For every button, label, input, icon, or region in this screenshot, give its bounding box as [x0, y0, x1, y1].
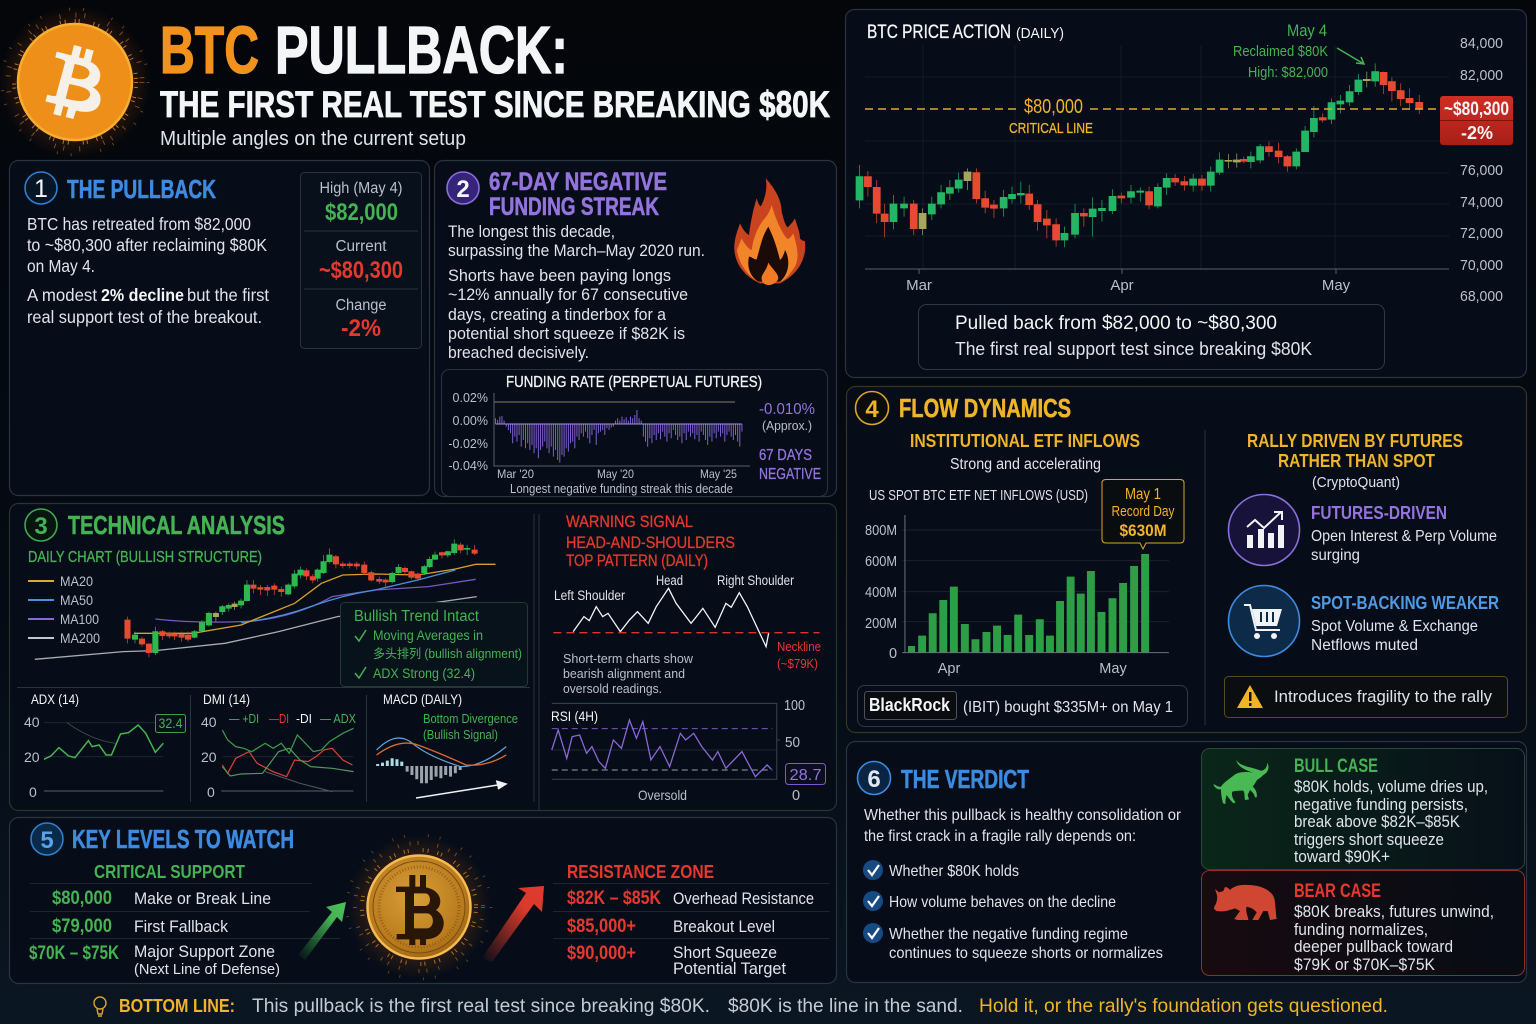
current price tag	[1440, 96, 1513, 145]
body text: BTC has retreated from $82,000	[27, 214, 251, 234]
chart: funding rate: NEGATIVE	[759, 466, 821, 483]
chart: ADX: 0	[29, 784, 37, 800]
critical line $80,000	[865, 96, 1440, 137]
chart: DMI: —DI	[269, 712, 289, 726]
heading: 67-DAY NEGATIVE	[489, 168, 667, 196]
icon: light bulb	[94, 997, 106, 1016]
support levels table: $79,000	[52, 916, 112, 937]
chart: funding rate	[442, 370, 828, 496]
ETF subheading	[869, 431, 1140, 504]
chart: ADX: 40	[24, 714, 40, 730]
price axis labels: 74,000	[1460, 194, 1503, 211]
panel: the pullback	[10, 160, 430, 496]
warning note: oversold readings.	[563, 681, 662, 696]
stats box: High (May 4)	[320, 180, 402, 197]
chart: funding rate: -0.010%	[759, 401, 815, 418]
ETF subheading: US SPOT BTC ETF NET INFLOWS (USD)	[869, 488, 1088, 504]
bull case: $80K holds, volume dries up,	[1294, 778, 1488, 796]
panel: key levels to watch	[10, 818, 836, 984]
icon: bear	[1214, 885, 1277, 920]
number badge 2: 2	[456, 176, 470, 203]
icon: bull	[1213, 760, 1268, 804]
icon: flame	[734, 178, 805, 285]
header: coin icon	[0, 6, 151, 158]
chart: head and shoulders pattern: Left Shoulder	[554, 588, 625, 603]
support levels table: First Fallback	[134, 918, 229, 936]
callout: record day: $630M	[1120, 521, 1166, 540]
price axis labels	[1460, 35, 1503, 305]
resistance levels table: Breakout Level	[673, 918, 775, 936]
callout: bullish trend intact: Bullish Trend Intact	[354, 608, 480, 625]
heading: FUNDING STREAK	[489, 193, 659, 221]
chart: ADX: ADX (14)	[31, 691, 79, 707]
bull case	[1202, 748, 1524, 870]
chart: RSI: 100	[784, 698, 805, 714]
current price tag: -2%	[1461, 123, 1493, 143]
futures subheading: RALLY DRIVEN BY FUTURES	[1247, 431, 1463, 451]
chart: ADX: 32.4	[158, 716, 183, 731]
futures-driven text: Open Interest & Perp Volume	[1311, 528, 1497, 545]
chart: RSI: 0	[792, 788, 800, 804]
number badge 1: 1	[34, 175, 48, 203]
bear case: $80K breaks, futures unwind,	[1294, 903, 1494, 921]
resistance levels table: $90,000+	[567, 943, 636, 964]
May 4 annotation: Reclaimed $80K	[1233, 44, 1328, 60]
resistance levels table: RESISTANCE ZONE	[567, 862, 714, 882]
callout: bullish trend intact: Moving Averages in	[373, 628, 483, 643]
warning note: bearish alignment and	[563, 666, 685, 681]
candlestick chart	[856, 45, 1449, 274]
May 4 annotation	[1233, 22, 1364, 81]
chart: funding rate: 0.00%	[453, 414, 488, 428]
verdict intro	[864, 807, 1182, 845]
month labels: Apr	[1110, 277, 1134, 294]
price axis labels: 72,000	[1460, 225, 1503, 242]
BlackRock callout: (IBIT) bought $335M+ on May 1	[963, 699, 1173, 716]
spot-backing text	[1311, 592, 1499, 654]
bull case: toward $90K+	[1294, 848, 1390, 866]
body text: breached decisively.	[448, 343, 589, 362]
warning note	[563, 651, 694, 696]
ETF subheading: Strong and accelerating	[950, 456, 1101, 473]
chart: ADX	[24, 691, 186, 800]
chart: head and shoulders pattern: Neckline	[777, 639, 821, 654]
resistance levels table	[553, 862, 830, 978]
number badge 5	[31, 823, 63, 855]
chart: MACD: Bottom Divergence	[423, 712, 518, 726]
moving average legend: MA100	[60, 611, 99, 627]
bear case: funding normalizes,	[1294, 921, 1428, 939]
checklist: continues to squeeze shorts or normalizes	[889, 945, 1163, 962]
checklist: Whether the negative funding regime	[889, 926, 1128, 943]
warning signal heading	[566, 513, 735, 570]
chart: DMI: DMI (14)	[203, 691, 250, 707]
checklist: How volume behaves on the decline	[889, 894, 1116, 911]
number badge 4	[856, 392, 888, 424]
BlackRock callout	[858, 686, 1188, 726]
title: Multiple angles on the current setup	[160, 128, 466, 150]
critical line $80,000: $80,000	[1024, 96, 1083, 118]
bull case: negative funding persists,	[1294, 796, 1468, 814]
price axis labels: 82,000	[1460, 67, 1503, 84]
support levels table: $80,000	[52, 888, 112, 909]
verdict intro: the first crack in a fragile rally depends on:	[864, 828, 1136, 845]
bar chart: ETF inflows: May	[1099, 661, 1127, 677]
month labels: Mar	[906, 277, 932, 294]
support levels table: Major Support Zone	[134, 943, 275, 961]
number badge 3: 3	[34, 513, 48, 540]
moving average legend: MA50	[60, 592, 93, 608]
heading: THE VERDICT	[901, 764, 1029, 794]
icon: shopping cart	[1228, 586, 1300, 656]
chart: DMI: — ADX	[320, 712, 357, 726]
body text: real support test of the breakout.	[27, 307, 262, 327]
chart: funding rate: May '20	[597, 467, 634, 481]
month labels	[906, 277, 1351, 294]
chart: head and shoulders pattern: Head	[656, 573, 683, 588]
BlackRock callout: BlackRock	[869, 695, 951, 715]
bull case: triggers short squeeze	[1294, 831, 1444, 849]
chart: ADX: 20	[24, 749, 40, 765]
heading: THE PULLBACK	[67, 174, 216, 204]
chart: head and shoulders pattern: Right Shoulder	[717, 573, 794, 588]
callout: bullish trend intact	[340, 602, 528, 686]
arrow: resistance up	[482, 886, 544, 962]
chart: funding rate: Mar '20	[497, 467, 534, 481]
bar chart: ETF inflows: 200M	[865, 616, 897, 632]
chart: MACD: MACD (DAILY)	[383, 691, 462, 707]
bear case: $79K or $70K–$75K	[1294, 956, 1435, 974]
stats box: $82,000	[325, 199, 398, 226]
resistance levels table: $85,000+	[567, 916, 636, 937]
heading: FLOW DYNAMICS	[899, 393, 1071, 423]
stats box: Change	[336, 297, 386, 314]
bar chart: ETF inflows: 800M	[865, 523, 897, 539]
chart: funding rate: -0.02%	[448, 437, 488, 451]
critical line $80,000: CRITICAL LINE	[1009, 120, 1093, 137]
chart: MACD: (Bullish Signal)	[423, 728, 498, 742]
futures-driven text: surging	[1311, 547, 1360, 564]
body text: but the first	[187, 285, 269, 305]
body text: Shorts have been paying longs	[448, 266, 671, 285]
chart: funding rate: 0.02%	[453, 391, 488, 405]
chart: RSI: 50	[785, 735, 800, 751]
price axis labels: 76,000	[1460, 162, 1503, 179]
bottom line banner: $80K is the line in the sand.	[728, 995, 963, 1017]
price axis labels: 84,000	[1460, 35, 1503, 52]
chart: funding rate: May '25	[700, 467, 737, 481]
callout: record day: May 1	[1125, 486, 1161, 503]
body text	[448, 222, 705, 362]
moving average legend: MA20	[60, 573, 93, 589]
bear case	[1202, 870, 1524, 976]
stats box	[300, 172, 422, 348]
chart: funding rate: 67 DAYS	[759, 447, 812, 464]
number badge 3	[25, 509, 57, 541]
resistance levels table: $82K – $85K	[567, 888, 661, 909]
callout: record day: Record Day	[1112, 504, 1175, 520]
resistance levels table: Short Squeeze	[673, 944, 777, 962]
panel: flow dynamics	[846, 386, 1526, 732]
heading	[489, 168, 667, 221]
bull case: BULL CASE	[1294, 756, 1378, 777]
bar chart: ETF inflows: Apr	[938, 661, 960, 677]
chart: funding rate: -0.04%	[448, 459, 488, 473]
chart: RSI: Oversold	[638, 787, 687, 803]
body text	[27, 214, 269, 327]
chart: DMI: — +DI	[229, 712, 259, 726]
warning signal heading: WARNING SIGNAL	[566, 513, 693, 531]
chart: DMI: 20	[201, 749, 217, 765]
bottom line banner: Hold it, or the rally's foundation gets questioned.	[979, 995, 1388, 1017]
bull case: break above $82K–$85K	[1294, 813, 1460, 831]
bar chart: ETF inflows: 400M	[865, 585, 897, 601]
moving average legend	[28, 573, 100, 646]
bar chart: ETF inflows: 600M	[865, 554, 897, 570]
May 4 annotation: May 4	[1287, 22, 1327, 40]
candlestick chart with moving averages	[35, 539, 496, 659]
number badge 1	[25, 172, 57, 204]
futures subheading	[1247, 431, 1463, 491]
callout: record day	[1102, 480, 1184, 549]
number badge 5: 5	[40, 827, 54, 854]
chart: RSI: 28.7	[790, 767, 822, 784]
bear case: deeper pullback toward	[1294, 938, 1453, 956]
callout: bullish trend intact: 多头排列 (bullish alignment)	[373, 647, 522, 661]
bottom line banner: This pullback is the first real test since breaking $80K.	[252, 995, 710, 1017]
bar chart: ETF inflows: 0	[889, 646, 897, 662]
title: THE FIRST REAL TEST SINCE BREAKING $80K	[160, 84, 830, 125]
support levels table: CRITICAL SUPPORT	[94, 862, 245, 882]
May 4 annotation: High: $82,000	[1248, 65, 1328, 81]
warning callout: Introduces fragility to the rally	[1274, 688, 1493, 706]
number badge 6: 6	[867, 766, 881, 793]
chart: DMI	[201, 691, 357, 800]
stats box: -2%	[341, 315, 381, 342]
ETF subheading: INSTITUTIONAL ETF INFLOWS	[910, 431, 1140, 451]
body text: ~12% annually for 67 consecutive	[448, 285, 688, 304]
support levels table: (Next Line of Defense)	[134, 961, 280, 978]
support levels table: $70K – $75K	[29, 943, 119, 964]
chart: MACD	[377, 691, 518, 798]
stats box: Current	[336, 238, 387, 255]
title	[160, 13, 830, 150]
chart heading: BTC PRICE ACTION	[867, 22, 1011, 43]
support levels table: Make or Break Line	[134, 890, 271, 908]
futures-driven text	[1311, 502, 1497, 564]
body text: The longest this decade,	[448, 222, 615, 241]
warning note: Short-term charts show	[563, 651, 694, 666]
bear case: BEAR CASE	[1294, 881, 1381, 902]
chart: head and shoulders pattern	[553, 573, 821, 671]
panel: negative funding streak	[434, 160, 836, 496]
moving average legend: MA200	[60, 630, 100, 646]
callout: bullish trend intact: ADX Strong (32.4)	[373, 666, 475, 681]
futures-driven text: FUTURES-DRIVEN	[1311, 502, 1447, 523]
callout: pulled back: The first real support test since breaking $80K	[955, 338, 1313, 359]
verdict intro: Whether this pullback is healthy consolidation or	[864, 807, 1182, 824]
bottom line banner: BOTTOM LINE:	[119, 995, 235, 1016]
title: PULLBACK:	[275, 13, 568, 88]
futures subheading: RATHER THAN SPOT	[1278, 451, 1435, 471]
stats box: ~$80,300	[319, 257, 403, 284]
resistance levels table: Potential Target	[673, 960, 786, 978]
chart: funding rate: (Approx.)	[762, 418, 812, 433]
warning signal heading: TOP PATTERN (DAILY)	[566, 552, 708, 570]
panel: technical analysis	[10, 504, 836, 810]
number badge 2	[447, 172, 479, 204]
price axis labels: 68,000	[1460, 288, 1503, 305]
panel: the verdict	[846, 742, 1526, 982]
body text: potential short squeeze if $82K is	[448, 324, 685, 343]
bar chart: ETF inflows	[865, 515, 1169, 677]
callout: pulled back: Pulled back from $82,000 to ~$80,300	[955, 312, 1277, 334]
spot-backing text: SPOT-BACKING WEAKER	[1311, 592, 1499, 613]
checklist	[863, 860, 1163, 962]
chart: head and shoulders pattern: (~$79K)	[777, 656, 818, 671]
chart: RSI: RSI (4H)	[551, 708, 598, 724]
arrow: support up	[298, 902, 346, 960]
body text: on May 4.	[27, 256, 95, 276]
warning signal heading: HEAD-AND-SHOULDERS	[566, 534, 735, 552]
warning callout	[1224, 676, 1508, 718]
callout: pulled back	[918, 304, 1384, 370]
heading: TECHNICAL ANALYSIS	[68, 510, 285, 540]
chart: DMI: -DI	[296, 712, 312, 726]
body text: A modest	[27, 285, 97, 305]
month labels: May	[1322, 277, 1351, 294]
icon: gold coin	[347, 835, 491, 979]
chart heading: (DAILY)	[1016, 25, 1064, 42]
number badge 6	[858, 762, 890, 794]
current price tag: ~$80,300	[1444, 99, 1509, 120]
support levels table	[29, 862, 340, 978]
checklist: Whether $80K holds	[889, 863, 1019, 880]
body text: 2% decline	[101, 285, 184, 305]
futures subheading: (CryptoQuant)	[1312, 475, 1400, 491]
body text: to ~$80,300 after reclaiming $80K	[27, 235, 267, 255]
subheading: DAILY CHART (BULLISH STRUCTURE)	[28, 549, 262, 566]
icon: futures chart	[1228, 494, 1300, 566]
title: BTC	[160, 13, 259, 88]
chart: RSI	[551, 698, 826, 804]
chart: DMI: 40	[201, 714, 217, 730]
chart: funding rate: Longest negative funding streak this decade	[510, 481, 733, 496]
body text: days, creating a tinderbox for a	[448, 305, 666, 324]
price axis labels: 70,000	[1460, 257, 1503, 274]
spot-backing text: Spot Volume & Exchange	[1311, 618, 1478, 635]
chart: funding rate: FUNDING RATE (PERPETUAL FUTURES)	[506, 374, 762, 391]
bottom line banner	[94, 995, 1388, 1017]
spot-backing text: Netflows muted	[1311, 637, 1418, 654]
panel: BTC price action chart	[846, 10, 1526, 378]
resistance levels table: Overhead Resistance	[673, 890, 814, 908]
heading: KEY LEVELS TO WATCH	[72, 824, 294, 854]
body text: surpassing the March–May 2020 run.	[448, 241, 705, 260]
number badge 4: 4	[865, 396, 879, 423]
chart: DMI: 0	[207, 784, 215, 800]
